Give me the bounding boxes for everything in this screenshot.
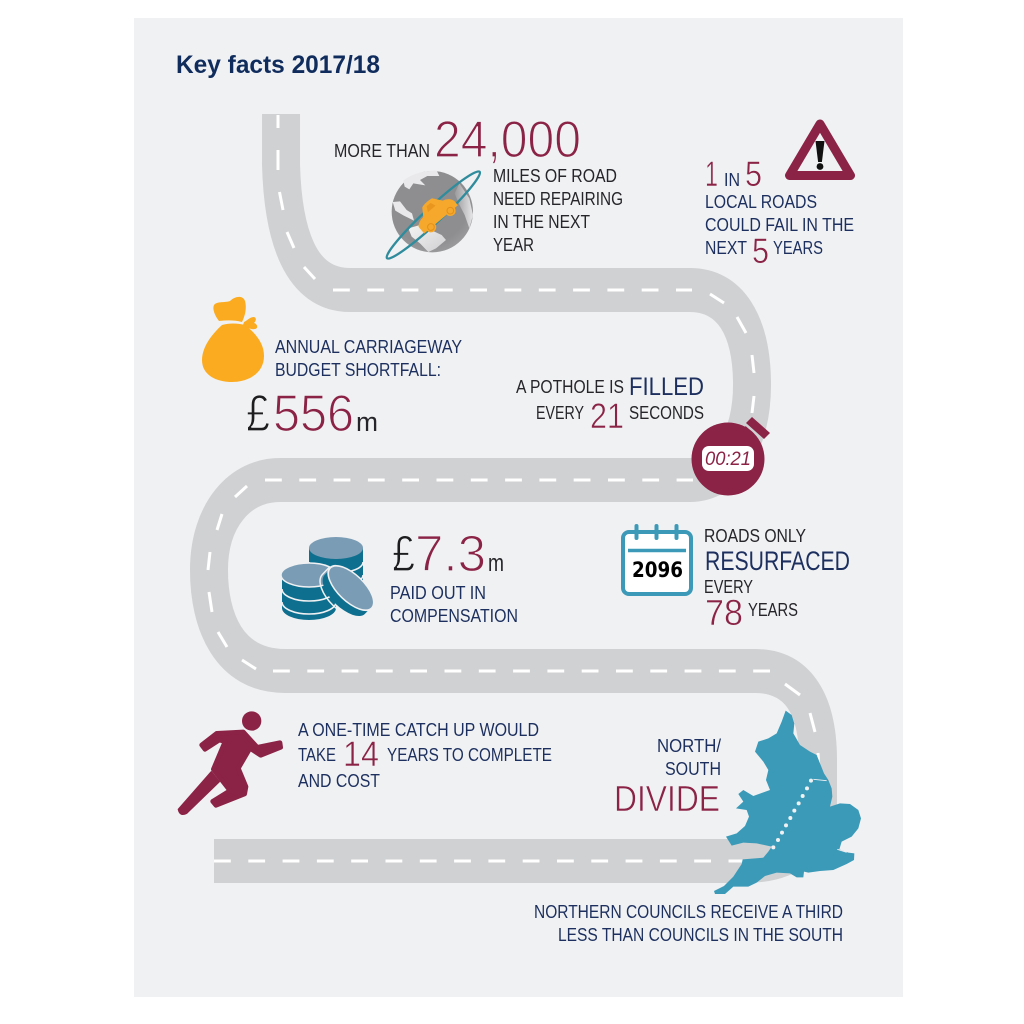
icon: map of England and Wales xyxy=(714,711,861,894)
stat: 1 in 5 local roads: IN xyxy=(724,170,740,190)
icon: warning triangle xyxy=(790,124,850,176)
stat: 1 in 5 local roads: NEXT xyxy=(705,238,747,258)
stat: resurfaced every 78 years: YEARS xyxy=(748,600,798,620)
stat: 1 in 5 local roads xyxy=(705,155,854,271)
text: northern councils: NORTHERN COUNCILS RECEIVE A THIRD xyxy=(534,902,843,922)
stat: compensation: COMPENSATION xyxy=(390,606,518,626)
stat: north/south divide: DIVIDE xyxy=(614,778,720,819)
stat: more than 24,000 miles: MILES OF ROAD xyxy=(493,166,617,186)
stat: compensation xyxy=(390,525,518,626)
stat: resurfaced every 78 years: ROADS ONLY xyxy=(704,526,806,546)
stat: pothole filled: 21 xyxy=(590,397,624,436)
stat: budget shortfall: 556 xyxy=(273,385,354,443)
stat: pothole filled: SECONDS xyxy=(629,403,704,423)
stat: pothole filled: EVERY xyxy=(536,403,584,423)
icon: runner xyxy=(178,711,281,814)
stat: budget shortfall xyxy=(246,337,462,443)
stat: more than 24,000 miles: IN THE NEXT xyxy=(493,212,590,232)
road xyxy=(208,114,819,861)
stat: more than 24,000 miles: MORE THAN xyxy=(334,141,430,161)
stat: budget shortfall: BUDGET SHORTFALL: xyxy=(275,360,441,380)
stat: more than 24,000 miles: 24,000 xyxy=(434,111,581,169)
title: Key facts 2017/18 xyxy=(176,51,380,79)
icon: calendar xyxy=(623,526,691,594)
icon: stopwatch: 00:21 xyxy=(705,449,751,470)
stat: 1 in 5 local roads: YEARS xyxy=(773,238,823,258)
stat: north/south divide xyxy=(614,736,721,819)
icon: globe with car xyxy=(382,166,485,264)
stat: compensation: m xyxy=(488,550,504,577)
stat: one-time catch up: YEARS TO COMPLETE xyxy=(387,745,552,765)
stat: compensation: PAID OUT IN xyxy=(390,583,486,603)
stat: north/south divide: NORTH/ xyxy=(657,736,721,756)
text: northern councils xyxy=(534,902,843,945)
stat: compensation: 7.3 xyxy=(415,525,486,582)
stat: resurfaced every 78 years: RESURFACED xyxy=(705,546,850,576)
icon: money bag xyxy=(202,297,264,382)
stat: pothole filled: FILLED xyxy=(629,373,704,401)
stat: compensation: £ xyxy=(392,525,415,582)
stat: one-time catch up: 14 xyxy=(343,735,379,774)
icon: stopwatch xyxy=(692,417,770,496)
stat: resurfaced every 78 years: EVERY xyxy=(704,577,753,597)
stat: 1 in 5 local roads: 5 xyxy=(752,232,769,271)
stat: more than 24,000 miles: YEAR xyxy=(493,235,534,255)
stat: 1 in 5 local roads: COULD FAIL IN THE xyxy=(705,215,854,235)
stat: 1 in 5 local roads: 5 xyxy=(745,155,762,194)
stat: budget shortfall: ANNUAL CARRIAGEWAY xyxy=(275,337,462,357)
stat: 1 in 5 local roads: 1 xyxy=(705,155,718,194)
stat: pothole filled: A POTHOLE IS xyxy=(516,377,624,397)
stat: pothole filled xyxy=(516,373,704,436)
stat: one-time catch up: TAKE xyxy=(298,745,336,765)
panel: background xyxy=(134,18,903,997)
stat: one-time catch up: A ONE-TIME CATCH UP WOULD xyxy=(298,720,539,740)
stat: one-time catch up: AND COST xyxy=(298,771,380,791)
stat: budget shortfall: m xyxy=(356,407,378,437)
stat: north/south divide: SOUTH xyxy=(665,759,721,779)
stat: resurfaced every 78 years xyxy=(704,526,850,633)
text: northern councils: LESS THAN COUNCILS IN THE SOUTH xyxy=(558,925,843,945)
stat: budget shortfall: £ xyxy=(246,385,270,443)
icon: coins xyxy=(281,537,382,627)
stat: more than 24,000 miles xyxy=(334,111,623,255)
icon: calendar: 2096 xyxy=(632,558,683,582)
stat: 1 in 5 local roads: LOCAL ROADS xyxy=(705,192,817,212)
stat: more than 24,000 miles: NEED REPAIRING xyxy=(493,189,623,209)
stat: one-time catch up xyxy=(298,720,552,791)
stat: resurfaced every 78 years: 78 xyxy=(705,592,743,633)
